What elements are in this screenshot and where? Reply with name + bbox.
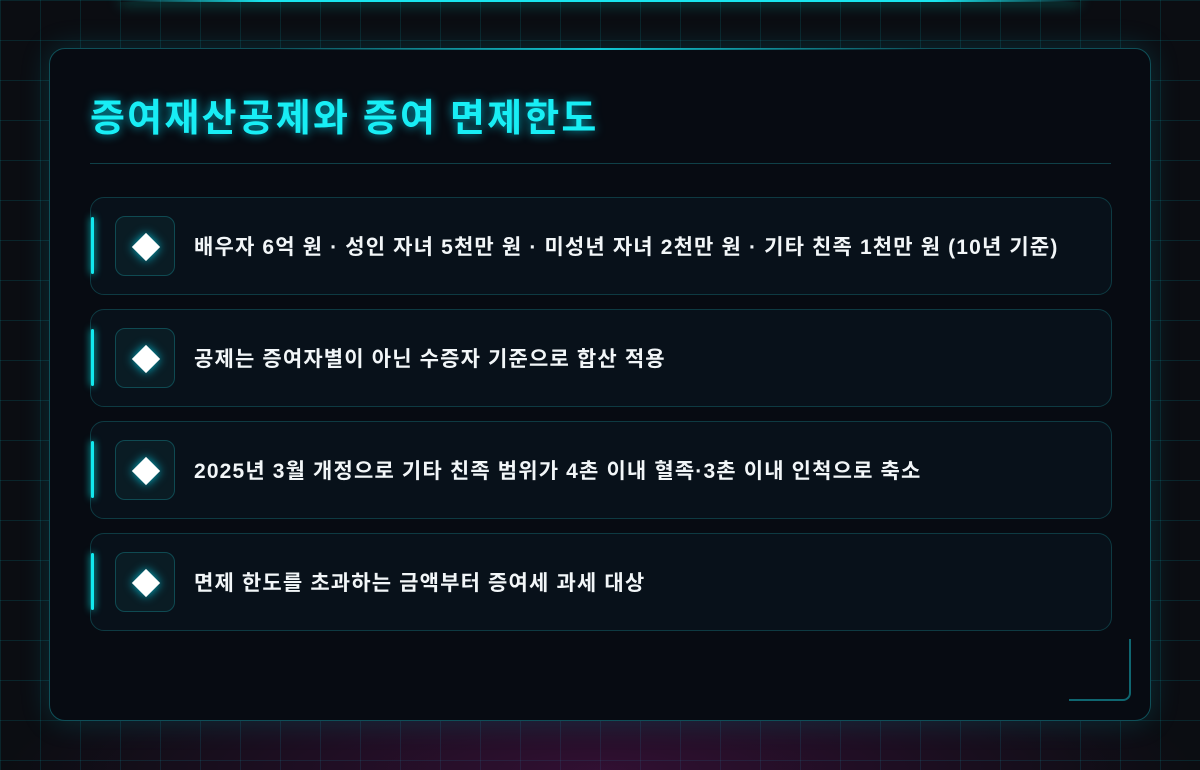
icon: diamond [115,552,175,612]
text: 면제 한도를 초과하는 금액부터 증여세 과세 대상 [194,572,645,595]
item 4 [90,533,1112,631]
title: 증여재산공제와 증여 면제한도 [90,98,599,140]
item 3 [90,421,1112,519]
icon: diamond [115,216,175,276]
text: 배우자 6억 원 · 성인 자녀 5천만 원 · 미성년 자녀 2천만 원 · 기타 친족 1천만 원 (10년 기준) [194,236,1058,259]
icon: diamond [115,328,175,388]
item 1 [90,197,1112,295]
corner bracket [1069,639,1131,701]
text: 공제는 증여자별이 아닌 수증자 기준으로 합산 적용 [194,348,666,371]
icon: diamond [115,440,175,500]
item 2 [90,309,1112,407]
text: 2025년 3월 개정으로 기타 친족 범위가 4촌 이내 혈족·3촌 이내 인척으로 축소 [194,460,921,483]
